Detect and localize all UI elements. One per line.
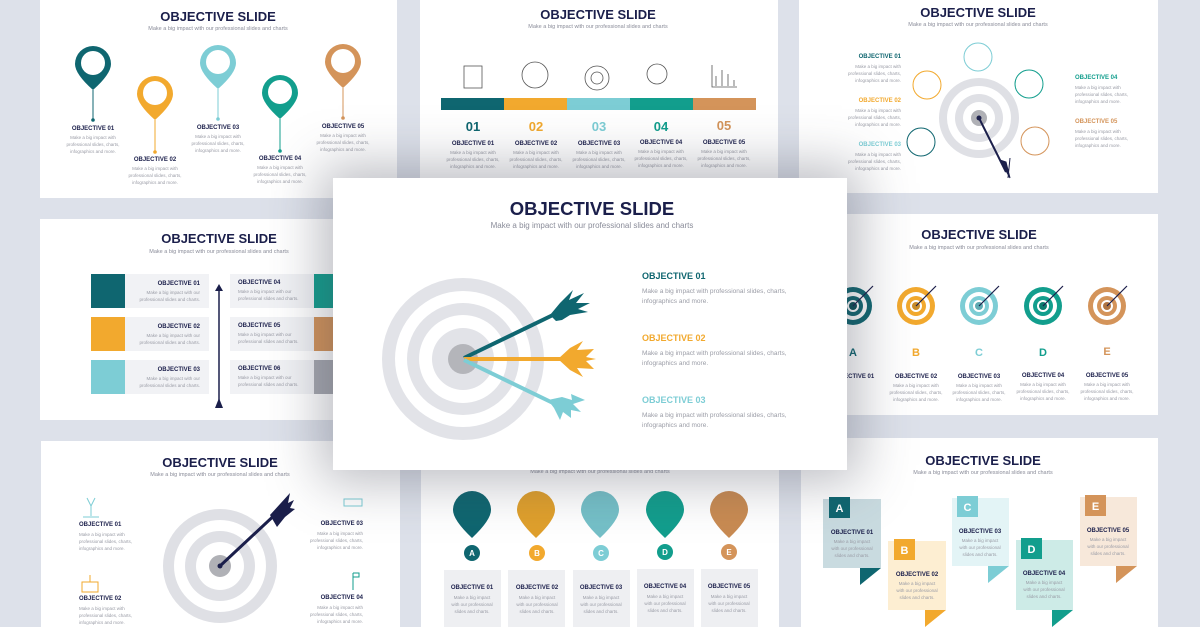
labels: OBJECTIVE 04 bbox=[259, 156, 302, 162]
slide: bottom-middle pins with letters: Make a big impact bbox=[454, 595, 491, 600]
slide: bottom-left big target: professional slides, charts, bbox=[310, 538, 363, 543]
slide: bottom-right letter cards: Make a big impact bbox=[1026, 580, 1063, 585]
pins bbox=[453, 491, 748, 538]
numbers and labels: Make a big impact with bbox=[701, 149, 747, 154]
slide: middle-right five targets: infographics and more. bbox=[1020, 396, 1066, 401]
slide: middle-right five targets: OBJECTIVE 01 bbox=[832, 374, 875, 380]
slide: bottom-right letter cards: A bbox=[836, 503, 844, 515]
slide: top-right target with icons: infographics and more. bbox=[1075, 143, 1121, 148]
slide: middle-left boxes with arrow: professional slides and charts. bbox=[139, 383, 200, 388]
slide: top-right target with icons: Make a big impact with bbox=[855, 108, 901, 113]
slide: bottom-middle pins with letters: slides and charts. bbox=[711, 608, 747, 613]
slide: top-left map pins bbox=[40, 0, 397, 198]
pins bbox=[75, 44, 361, 154]
labels: infographics and more. bbox=[132, 180, 178, 185]
labels: Make a big impact with bbox=[132, 166, 178, 171]
slide: bottom-right letter cards: with our professional bbox=[831, 546, 873, 551]
slide: middle-right five targets: Make a big impact with our professional slides and charts bbox=[909, 245, 1049, 251]
slide: middle-right five targets: Make a big impact with bbox=[1020, 382, 1066, 387]
slide: bottom-left big target: OBJECTIVE 01 bbox=[79, 522, 122, 528]
slide: bottom-right letter cards: slides and charts. bbox=[1026, 594, 1062, 599]
slide: top-right target with icons: Make a big impact with bbox=[1075, 85, 1121, 90]
icons bbox=[464, 62, 737, 90]
slide: bottom-right letter cards: Make a big impact bbox=[834, 539, 871, 544]
title: OBJECTIVE SLIDE bbox=[510, 198, 674, 219]
numbers and labels: professional slides, charts, bbox=[446, 157, 500, 162]
numbers and labels bbox=[446, 118, 751, 169]
numbers and labels: OBJECTIVE 02 bbox=[515, 141, 558, 147]
numbers and labels: Make a big impact with bbox=[638, 149, 684, 154]
numbers and labels: professional slides, charts, bbox=[634, 156, 688, 161]
slide: middle-left boxes with arrow bbox=[40, 219, 397, 420]
slide: bottom-right letter cards: Make a big impact bbox=[962, 538, 999, 543]
slide: middle-left boxes with arrow: OBJECTIVE SLIDE bbox=[161, 231, 277, 246]
slide: bottom-middle pins with letters: Make a big impact with our professional slides and charts bbox=[530, 469, 670, 475]
slide: middle-left boxes with arrow: Make a big impact with our bbox=[238, 332, 292, 337]
slide: bottom-middle pins with letters: with our professional bbox=[451, 602, 493, 607]
labels: professional slides, charts, bbox=[128, 173, 182, 178]
slide: top-right target with icons: professional slides, charts, bbox=[1075, 136, 1128, 141]
slide: middle-right five targets: C bbox=[975, 347, 983, 359]
numbers and labels: infographics and more. bbox=[576, 164, 622, 169]
slide: center featured target with three arrows: infographics and more. bbox=[642, 360, 708, 367]
slide: bottom-middle pins with letters: OBJECTIVE 03 bbox=[580, 585, 623, 591]
labels: infographics and more. bbox=[195, 148, 241, 153]
labels: OBJECTIVE 01 bbox=[72, 126, 115, 132]
slide: center featured target with three arrows: Make a big impact with professional slides, charts, bbox=[642, 412, 787, 419]
slide: middle-left boxes with arrow: Make a big impact with our bbox=[146, 376, 200, 381]
slide: middle-right five targets: OBJECTIVE 05 bbox=[1086, 373, 1129, 379]
slide: middle-right five targets: professional slides, charts, bbox=[1016, 389, 1070, 394]
objective texts bbox=[642, 271, 706, 405]
slide: middle-left boxes with arrow: professional slides and charts. bbox=[238, 296, 299, 301]
slide: bottom-right letter cards: OBJECTIVE 01 bbox=[831, 530, 874, 536]
slide: bottom-middle pins with letters: with our professional bbox=[708, 601, 750, 606]
slide: middle-right five targets bbox=[815, 214, 1158, 415]
numbers and labels: 05 bbox=[717, 118, 731, 133]
slide: center featured target with three arrows: Make a big impact with professional slides, charts, bbox=[642, 350, 787, 357]
arrow: light teal bbox=[464, 360, 585, 420]
slide: bottom-right letter cards: slides and charts. bbox=[962, 552, 998, 557]
slide: bottom-middle pins with letters: E bbox=[726, 548, 732, 557]
slide: middle-left boxes with arrow: OBJECTIVE 01 bbox=[158, 281, 201, 287]
slide: bottom-left big target: OBJECTIVE 02 bbox=[79, 596, 122, 602]
labels bbox=[66, 124, 370, 185]
slide: bottom-right letter cards bbox=[801, 438, 1158, 627]
labels: professional slides, charts, bbox=[66, 142, 120, 147]
slide: bottom-middle pins with letters: slides and charts. bbox=[647, 608, 683, 613]
slide: bottom-middle pins with letters: Make a big impact bbox=[519, 595, 556, 600]
numbers and labels: 01 bbox=[466, 119, 480, 134]
slide: bottom-right letter cards: Make a big impact bbox=[1090, 537, 1127, 542]
slide: bottom-right letter cards: with our professional bbox=[1023, 587, 1065, 592]
slide: bottom-middle pins with letters: D bbox=[662, 548, 668, 557]
slide: bottom-left big target: professional slides, charts, bbox=[310, 612, 363, 617]
numbers and labels: professional slides, charts, bbox=[572, 157, 626, 162]
slide: bottom-left big target: OBJECTIVE 03 bbox=[321, 521, 364, 527]
slide: top-right target with icons: Make a big impact with our professional slides and charts bbox=[908, 22, 1048, 28]
slide: center featured target with three arrows: Make a big impact with professional slides, charts, bbox=[642, 288, 787, 295]
slide: center featured target with three arrows: Make a big impact with our professional slides and charts bbox=[491, 221, 693, 230]
slide: middle-right five targets: A bbox=[849, 347, 857, 359]
icons bbox=[82, 498, 362, 592]
slide: top-middle timeline bar bbox=[420, 0, 778, 180]
slide: middle-right five targets: professional slides, charts, bbox=[1080, 389, 1134, 394]
slide: middle-left boxes with arrow: professional slides and charts. bbox=[139, 297, 200, 302]
slide: middle-left boxes with arrow: professional slides and charts. bbox=[139, 340, 200, 345]
slide: bottom-middle pins with letters: OBJECTIVE 05 bbox=[708, 584, 751, 590]
slide: bottom-right letter cards: slides and charts. bbox=[834, 553, 870, 558]
slide: top-right target with icons: OBJECTIVE SLIDE bbox=[920, 5, 1036, 20]
slide: middle-right five targets: B bbox=[912, 347, 920, 359]
numbers and labels: OBJECTIVE 03 bbox=[578, 141, 621, 147]
icon circles bbox=[907, 43, 1049, 156]
slide: middle-right five targets: Make a big impact with bbox=[893, 383, 939, 388]
slide: center featured target with three arrows bbox=[333, 178, 847, 470]
slide: middle-left boxes with arrow: professional slides and charts. bbox=[238, 382, 299, 387]
slide: top-middle timeline bar: Make a big impact with our professional slides and charts bbox=[528, 24, 668, 30]
slide: bottom-left big target: Make a big impact with our professional slides and charts bbox=[150, 472, 290, 478]
numbers and labels: professional slides, charts, bbox=[509, 157, 563, 162]
labels: OBJECTIVE 03 bbox=[197, 125, 240, 131]
slide: middle-left boxes with arrow: Make a big impact with our bbox=[238, 375, 292, 380]
labels: Make a big impact with bbox=[320, 133, 366, 138]
text: OBJECTIVE 01 bbox=[859, 54, 902, 60]
slide: bottom-right letter cards: B bbox=[901, 545, 909, 557]
text bbox=[859, 54, 1118, 148]
slide: bottom-right letter cards: with our professional bbox=[896, 588, 938, 593]
slide: bottom-right letter cards: OBJECTIVE 03 bbox=[959, 529, 1002, 535]
slide: middle-left boxes with arrow: OBJECTIVE 06 bbox=[238, 366, 281, 372]
slide: middle-right five targets: infographics and more. bbox=[893, 397, 939, 402]
objective texts: OBJECTIVE 01 bbox=[642, 271, 706, 281]
slide: middle-left boxes with arrow: Make a big impact with our professional slides and charts bbox=[149, 249, 289, 255]
slide: bottom-right letter cards: E bbox=[1092, 501, 1099, 513]
slide: bottom-left big target: professional slides, charts, bbox=[79, 539, 132, 544]
slide: top-right target with icons: professional slides, charts, bbox=[848, 115, 901, 120]
slide: middle-left boxes with arrow: OBJECTIVE 05 bbox=[238, 323, 281, 329]
numbers and labels: 02 bbox=[529, 119, 543, 134]
slide: bottom-right letter cards: with our professional bbox=[959, 545, 1001, 550]
slide: bottom-left big target: Make a big impact with bbox=[317, 531, 363, 536]
labels: Make a big impact with bbox=[70, 135, 116, 140]
slide: bottom-left big target: infographics and more. bbox=[79, 546, 125, 551]
numbers and labels: infographics and more. bbox=[513, 164, 559, 169]
slide: bottom-right letter cards: slides and charts. bbox=[1090, 551, 1126, 556]
slide: bottom-left big target: Make a big impact with bbox=[79, 532, 125, 537]
slide: middle-right five targets: OBJECTIVE 02 bbox=[895, 374, 938, 380]
labels: professional slides, charts, bbox=[191, 141, 245, 146]
slide: top-right target with icons: professional slides, charts, bbox=[848, 71, 901, 76]
slide: bottom-right letter cards: with our professional bbox=[1087, 544, 1129, 549]
slide: middle-right five targets: OBJECTIVE SLIDE bbox=[921, 227, 1037, 242]
slide: middle-right five targets: infographics and more. bbox=[956, 397, 1002, 402]
title: OBJECTIVE SLIDE bbox=[160, 9, 276, 24]
numbers and labels: infographics and more. bbox=[450, 164, 496, 169]
slide: top-right target with icons: infographics and more. bbox=[1075, 99, 1121, 104]
slide: bottom-middle pins with letters: A bbox=[469, 549, 475, 558]
numbers and labels: Make a big impact with bbox=[576, 150, 622, 155]
slide: top-right target with icons: Make a big impact with bbox=[855, 152, 901, 157]
slide: bottom-middle pins with letters: slides and charts. bbox=[454, 609, 490, 614]
slide: bottom-middle pins with letters: B bbox=[534, 549, 540, 558]
slide: bottom-middle pins with letters: OBJECTIVE 02 bbox=[516, 585, 559, 591]
slide: bottom-middle pins with letters: Make a big impact bbox=[647, 594, 684, 599]
slide: top-left map pins: Make a big impact with our professional slides and charts bbox=[148, 26, 288, 32]
slide: middle-right five targets: OBJECTIVE 04 bbox=[1022, 373, 1065, 379]
slide: center featured target with three arrows: infographics and more. bbox=[642, 298, 708, 305]
slide: middle-left boxes with arrow: Make a big impact with our bbox=[146, 290, 200, 295]
numbers and labels: OBJECTIVE 01 bbox=[452, 141, 495, 147]
objective texts: OBJECTIVE 03 bbox=[642, 395, 706, 405]
slide: middle-left boxes with arrow: OBJECTIVE 04 bbox=[238, 280, 281, 286]
labels: professional slides, charts, bbox=[316, 140, 370, 145]
labels: Make a big impact with bbox=[257, 165, 303, 170]
slide: middle-right five targets: OBJECTIVE 03 bbox=[958, 374, 1001, 380]
labels: infographics and more. bbox=[257, 179, 303, 184]
slide: bottom-left big target: infographics and more. bbox=[317, 619, 363, 624]
slide: bottom-left big target bbox=[41, 441, 400, 627]
numbers and labels: professional slides, charts, bbox=[697, 156, 751, 161]
objective texts: OBJECTIVE 02 bbox=[642, 333, 706, 343]
slide: bottom-middle pins with letters: C bbox=[598, 549, 604, 558]
slide: bottom-left big target: infographics and more. bbox=[79, 620, 125, 625]
slide: middle-left boxes with arrow: professional slides and charts. bbox=[238, 339, 299, 344]
slide: top-right target with icons: Make a big impact with bbox=[855, 64, 901, 69]
slide: bottom-right letter cards: OBJECTIVE 04 bbox=[1023, 571, 1066, 577]
slide: bottom-right letter cards: OBJECTIVE 05 bbox=[1087, 528, 1130, 534]
boxes bbox=[444, 569, 758, 627]
slide: middle-right five targets: infographics and more. bbox=[1084, 396, 1130, 401]
numbers and labels: Make a big impact with bbox=[513, 150, 559, 155]
text: OBJECTIVE 04 bbox=[1075, 75, 1118, 81]
slide: bottom-right letter cards: C bbox=[964, 502, 972, 514]
labels: OBJECTIVE 02 bbox=[134, 157, 177, 163]
slide: center featured target with three arrows: infographics and more. bbox=[642, 422, 708, 429]
slide: middle-right five targets: professional slides, charts, bbox=[952, 390, 1006, 395]
slide: bottom-left big target: OBJECTIVE 04 bbox=[321, 595, 364, 601]
slide: bottom-middle pins with letters: slides and charts. bbox=[519, 609, 555, 614]
slide: bottom-left big target: Make a big impact with bbox=[317, 605, 363, 610]
labels: professional slides, charts, bbox=[253, 172, 307, 177]
slide: bottom-middle pins with letters: Make a big impact bbox=[711, 594, 748, 599]
slide: middle-right five targets: E bbox=[1103, 346, 1111, 358]
labels: Make a big impact with bbox=[195, 134, 241, 139]
target bbox=[939, 78, 1019, 178]
slide: middle-right five targets: Make a big impact with bbox=[1084, 382, 1130, 387]
slide: bottom-middle pins with letters: with our professional bbox=[580, 602, 622, 607]
slide: bottom-left big target: professional slides, charts, bbox=[79, 613, 132, 618]
numbers and labels: 04 bbox=[654, 119, 669, 134]
arrow: orange bbox=[464, 341, 596, 377]
numbers and labels: infographics and more. bbox=[701, 163, 747, 168]
target bbox=[382, 278, 544, 440]
labels: infographics and more. bbox=[70, 149, 116, 154]
slide: middle-right five targets: professional slides, charts, bbox=[889, 390, 943, 395]
slide: middle-right five targets: Make a big impact with bbox=[956, 383, 1002, 388]
slide: bottom-middle pins with letters: with our professional bbox=[516, 602, 558, 607]
labels: infographics and more. bbox=[320, 147, 366, 152]
target bbox=[163, 493, 295, 623]
slide: middle-left boxes with arrow: OBJECTIVE 03 bbox=[158, 367, 201, 373]
slide: bottom-left big target: infographics and more. bbox=[317, 545, 363, 550]
slide: bottom-right letter cards: OBJECTIVE SLIDE bbox=[925, 453, 1041, 468]
slide: top-right target with icons: infographics and more. bbox=[855, 166, 901, 171]
slide: bottom-middle pins with letters: slides and charts. bbox=[583, 609, 619, 614]
targets bbox=[834, 286, 1127, 325]
slide: top-middle timeline bar: OBJECTIVE SLIDE bbox=[540, 7, 656, 22]
numbers and labels: infographics and more. bbox=[638, 163, 684, 168]
slide: top-right target with icons: infographics and more. bbox=[855, 122, 901, 127]
vertical arrow bbox=[215, 284, 223, 408]
slide: bottom-left big target: Make a big impact with bbox=[79, 606, 125, 611]
slide: bottom-middle pins with letters bbox=[421, 445, 779, 627]
left boxes bbox=[91, 274, 348, 394]
color bar bbox=[441, 98, 756, 110]
slide: bottom-middle pins with letters: Make a big impact bbox=[583, 595, 620, 600]
slide: bottom-right letter cards: OBJECTIVE 02 bbox=[896, 572, 939, 578]
labels: OBJECTIVE 05 bbox=[322, 124, 365, 130]
cards bbox=[823, 495, 1137, 627]
slide: bottom-right letter cards: D bbox=[1028, 544, 1036, 556]
numbers and labels: Make a big impact with bbox=[450, 150, 496, 155]
arrow: teal bbox=[464, 290, 590, 358]
numbers and labels: OBJECTIVE 05 bbox=[703, 140, 746, 146]
slide: middle-left boxes with arrow: Make a big impact with our bbox=[146, 333, 200, 338]
slide: top-right target with icons: professional slides, charts, bbox=[1075, 92, 1128, 97]
slide: bottom-middle pins with letters: OBJECTIVE 04 bbox=[644, 584, 687, 590]
slide: top-right target with icons: Make a big impact with bbox=[1075, 129, 1121, 134]
numbers and labels: 03 bbox=[592, 119, 606, 134]
slide: bottom-left big target: OBJECTIVE SLIDE bbox=[162, 455, 278, 470]
slide: bottom-middle pins with letters: OBJECTIVE 01 bbox=[451, 585, 494, 591]
slide: top-right target with icons: infographics and more. bbox=[855, 78, 901, 83]
slide: bottom-right letter cards: Make a big impact bbox=[899, 581, 936, 586]
slide: bottom-middle pins with letters: with our professional bbox=[644, 601, 686, 606]
slide: top-right target with icons bbox=[799, 0, 1158, 193]
slide: middle-right five targets: D bbox=[1039, 347, 1047, 359]
text: OBJECTIVE 05 bbox=[1075, 119, 1118, 125]
text: OBJECTIVE 02 bbox=[859, 98, 902, 104]
slide: middle-left boxes with arrow: OBJECTIVE 02 bbox=[158, 324, 201, 330]
numbers and labels: OBJECTIVE 04 bbox=[640, 140, 683, 146]
slide: bottom-right letter cards: slides and charts. bbox=[899, 595, 935, 600]
text: OBJECTIVE 03 bbox=[859, 142, 902, 148]
slide: bottom-right letter cards: Make a big impact with our professional slides and charts bbox=[913, 470, 1053, 476]
slide: top-right target with icons: professional slides, charts, bbox=[848, 159, 901, 164]
slide: middle-left boxes with arrow: Make a big impact with our bbox=[238, 289, 292, 294]
